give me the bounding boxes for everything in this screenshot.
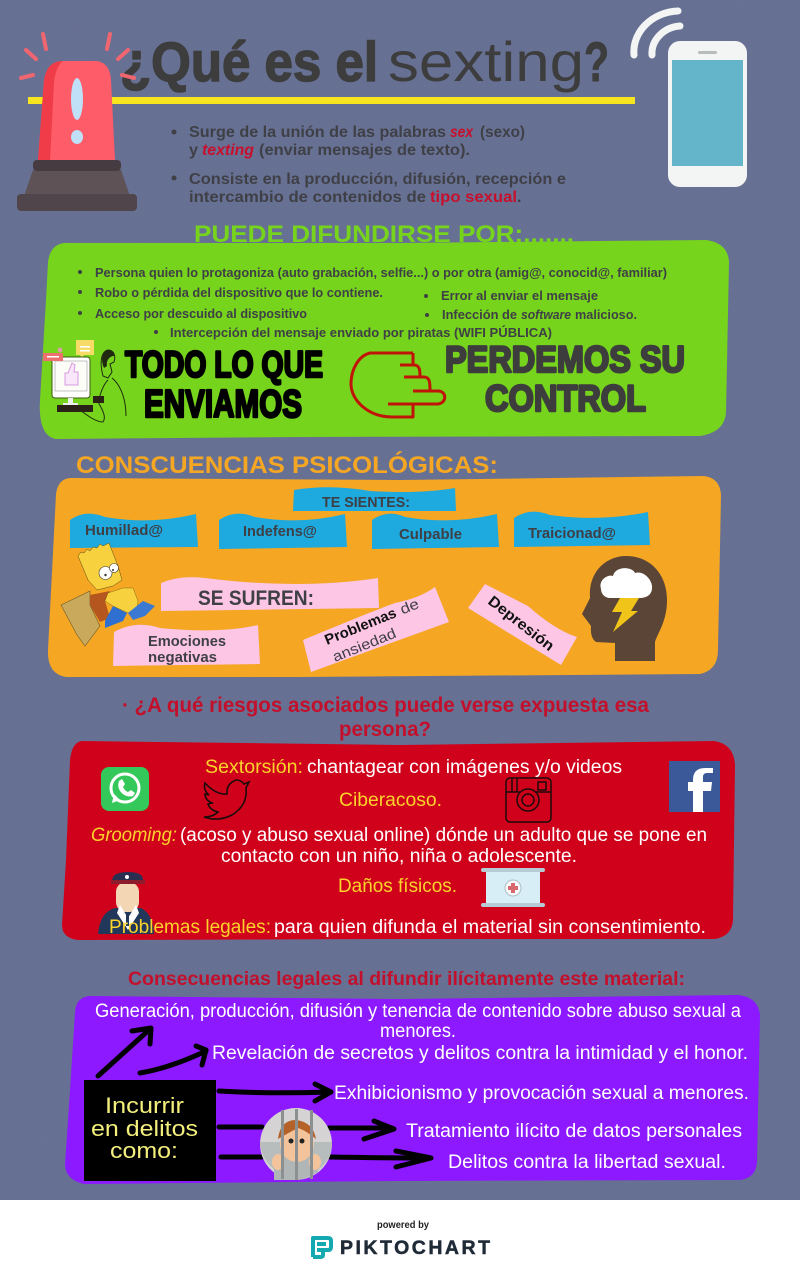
ribbon: culpable [372, 514, 499, 549]
text block: definition: tipo sexual [430, 189, 517, 206]
list of channels: Acceso por descuido al dispositivo [95, 306, 307, 321]
ribbon: se sufren [161, 577, 379, 611]
icon: siren [17, 34, 137, 211]
ribbon: traicionado: Traicionad@ [528, 525, 616, 542]
text block: definition: texting [202, 142, 254, 159]
heading: consecuencias legales: Consecuencias legales al difundir ilícitamente este material: [128, 969, 685, 990]
text block: definition: Consiste en la producción, difusión, recepción e [189, 171, 566, 188]
text: problemas legales: Problemas legales: [109, 917, 271, 938]
icon: head with storm [582, 556, 667, 661]
list of channels [78, 265, 667, 340]
icon: sad boy [61, 543, 155, 646]
box: incurrir en delitos [84, 1080, 216, 1181]
title: ? [584, 30, 609, 93]
title: sexting [388, 30, 584, 93]
footer: powered by piktochart: PIKTOCHART [340, 1237, 490, 1259]
list of channels: software [521, 307, 571, 322]
ribbon: emociones negativas: Emociones [148, 633, 226, 650]
text: ciberacoso: Ciberacoso. [339, 790, 442, 811]
icon: bandage [481, 868, 545, 907]
text: problemas legales: para quien difunda el material sin consentimiento. [274, 917, 706, 938]
footer: powered by piktochart [313, 1220, 490, 1259]
slogan: todo lo que enviamos [125, 344, 323, 426]
list of channels: malicioso. [575, 307, 637, 322]
icon: person at computer [43, 340, 126, 422]
text: grooming: (acoso y abuso sexual online) dónde un adulto que se pone en [180, 825, 707, 846]
heading: riesgos: persona? [339, 718, 431, 741]
list of offences [95, 1001, 749, 1173]
ribbon: emociones negativas: negativas [148, 649, 217, 666]
ribbon: problemas de ansiedad [303, 587, 449, 672]
icon: twitter [204, 780, 249, 819]
ribbon: humillado: Humillad@ [85, 522, 163, 539]
text block: definition: y [189, 142, 198, 159]
ribbon: depresion [468, 584, 577, 665]
icon: police officer [98, 872, 154, 934]
text: grooming: contacto con un niño, niña o adolescente. [221, 846, 577, 867]
icon: prisoner behind bars [260, 1108, 332, 1180]
text block: definition: (enviar mensajes de texto). [259, 142, 470, 159]
text block: definition: Surge de la unión de las palabras [189, 124, 446, 141]
text block: definition: sex [450, 124, 474, 141]
text: grooming [91, 825, 707, 867]
heading: riesgos [122, 694, 649, 741]
ribbon: humillado [70, 514, 198, 548]
text: sextorsion: Sextorsión: [205, 757, 303, 778]
box: incurrir en delitos: Incurrir [105, 1093, 184, 1118]
panel: psychological consequences [48, 476, 721, 677]
ribbon: problemas de ansiedad: Problemas [323, 605, 399, 649]
list of channels: Intercepción del mensaje enviado por piratas (WIFI PÚBLICA) [170, 325, 552, 340]
list of offences: Exhibicionismo y provocación sexual a menores. [334, 1083, 749, 1104]
list of offences: menores. [380, 1021, 456, 1042]
text block: definition: (sexo) [480, 124, 525, 141]
text block: definition: intercambio de contenidos de [189, 189, 426, 206]
icon: instagram [506, 778, 551, 822]
text: grooming: Grooming: [91, 825, 177, 846]
slogan: todo lo que enviamos: TODO LO QUE [125, 344, 323, 385]
arrows [98, 1028, 431, 1167]
heading: consecuencias psicologicas: CONSCUENCIAS PSICOLÓGICAS: [76, 451, 498, 479]
list of channels: Infección de [442, 307, 517, 322]
box: incurrir en delitos: en delitos [91, 1116, 198, 1141]
ribbon: indefenso [219, 514, 347, 549]
list of offences: Delitos contra la libertad sexual. [448, 1152, 726, 1173]
box: incurrir en delitos: como: [110, 1138, 178, 1163]
panel: green spread channels [40, 240, 729, 439]
slogan: todo lo que enviamos: ENVIAMOS [144, 383, 302, 426]
ribbon: te sientes [293, 487, 456, 511]
ribbon: te sientes: TE SIENTES: [322, 494, 410, 511]
heading: riesgos: · ¿A qué riesgos asociados puede verse expuesta esa [122, 694, 649, 717]
footer: powered by piktochart: powered by [377, 1220, 429, 1231]
ribbon: indefenso: Indefens@ [243, 523, 317, 540]
title [120, 30, 609, 93]
list of channels: Robo o pérdida del dispositivo que lo contiene. [95, 285, 383, 300]
list of channels: Error al enviar el mensaje [441, 288, 598, 303]
slogan: perdemos su control: CONTROL [485, 378, 646, 419]
slogan: perdemos su control [445, 339, 685, 419]
text block: definition: . [517, 189, 521, 206]
icon: facebook [669, 761, 720, 812]
list of offences: Tratamiento ilícito de datos personales [406, 1121, 742, 1142]
panel: risks [62, 741, 735, 940]
ribbon: culpable: Culpable [399, 526, 462, 543]
icon: pointing hand [351, 353, 445, 417]
panel: legal consequences [65, 995, 760, 1184]
icon: whatsapp [101, 767, 149, 811]
text block: definition [172, 124, 566, 206]
text: danos fisicos: Daños físicos. [338, 876, 457, 897]
ribbon: se sufren: SE SUFREN: [198, 587, 314, 610]
ribbon: emociones negativas [113, 625, 260, 666]
list of offences: Generación, producción, difusión y tenencia de contenido sobre abuso sexual a [95, 1001, 741, 1022]
heading: puede difundirse: PUEDE DIFUNDIRSE POR:....... [194, 221, 574, 248]
ribbon: problemas de ansiedad: ansiedad [331, 626, 399, 666]
ribbon: problemas de ansiedad: de [398, 596, 422, 618]
ribbon: traicionado [514, 512, 650, 547]
title: ¿Qué es el [120, 30, 378, 93]
list of channels: Persona quien lo protagoniza (auto grabación, selfie...) o por otra (amig@, conocid@, familiar) [95, 265, 667, 280]
text: sextorsion: chantagear con imágenes y/o videos [307, 757, 622, 778]
list of offences: Revelación de secretos y delitos contra la intimidad y el honor. [212, 1043, 748, 1064]
icon: phone with wifi [634, 11, 747, 187]
ribbon: depresion: Depresión [485, 593, 557, 655]
slogan: perdemos su control: PERDEMOS SU [445, 339, 685, 380]
